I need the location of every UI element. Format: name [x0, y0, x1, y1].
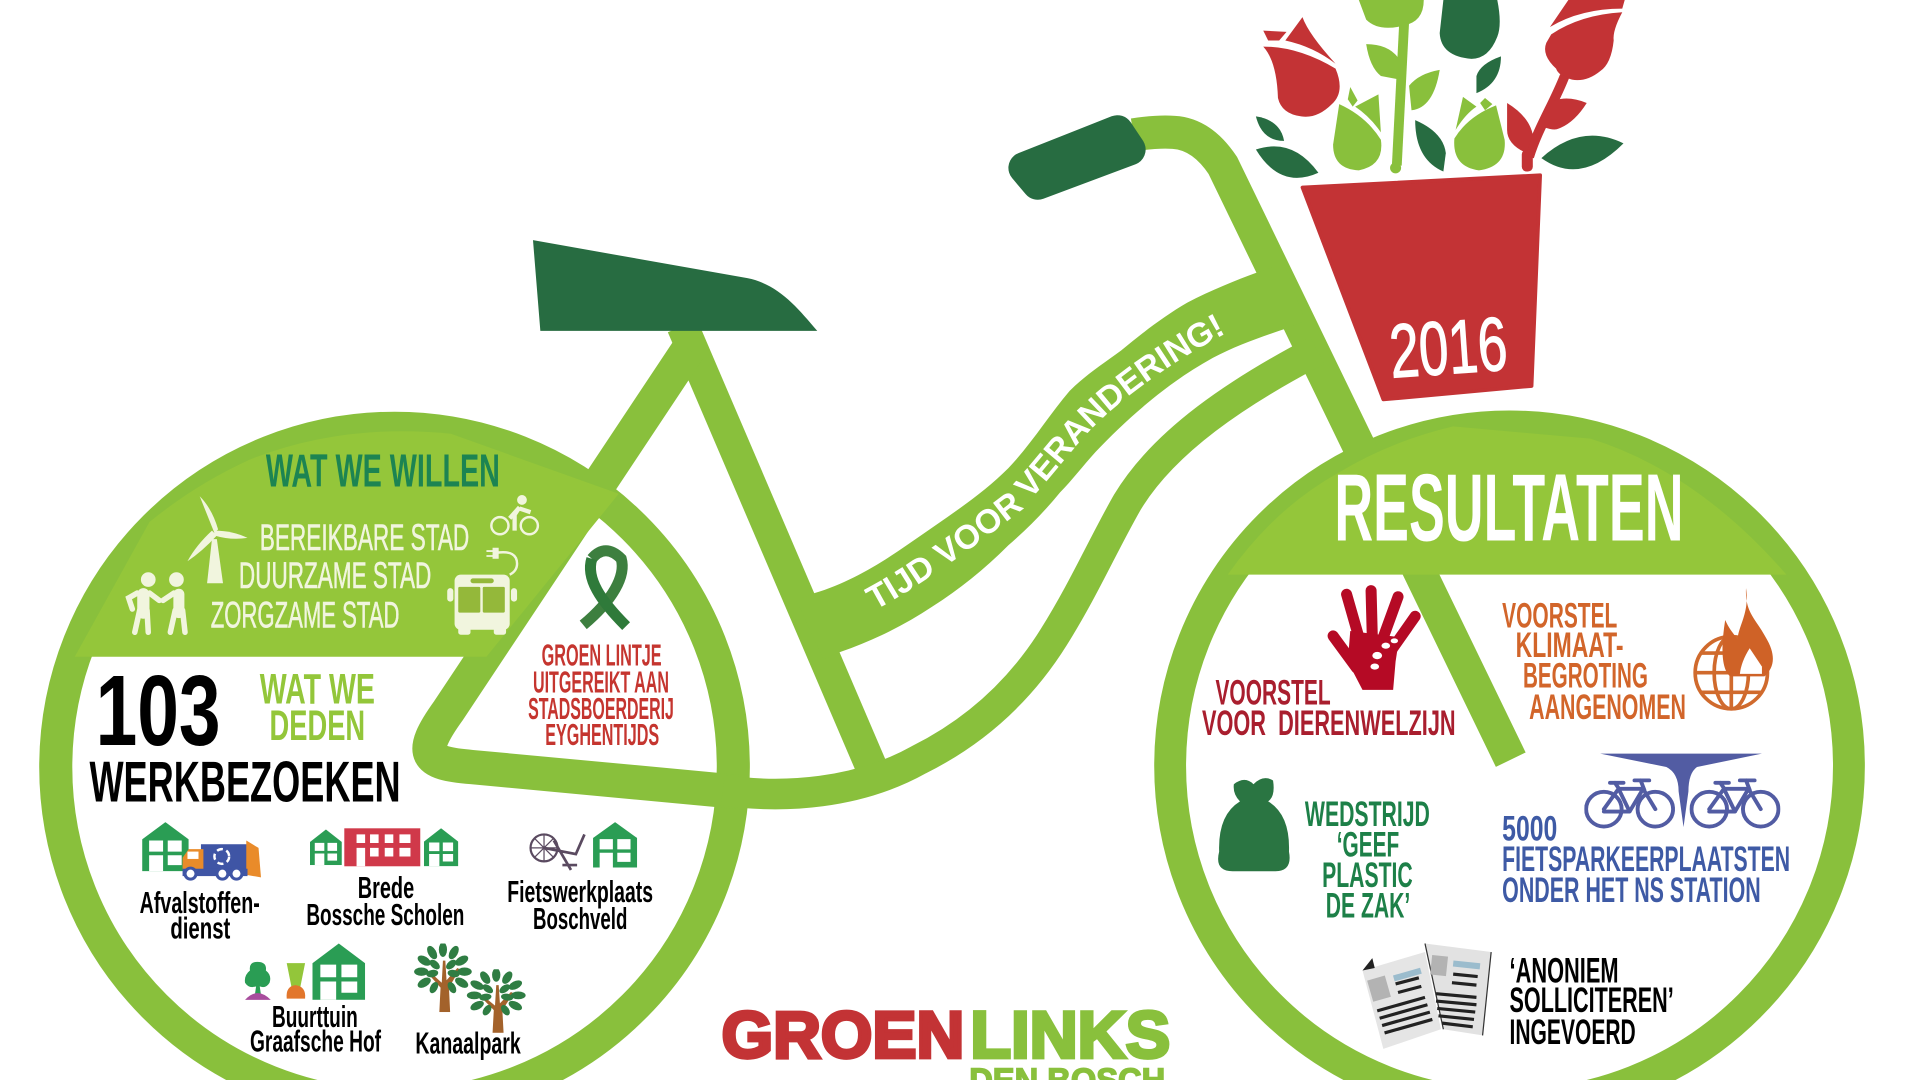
caption: buurttuin graafsche hof: Buurttuin: [272, 1000, 358, 1034]
centre green stem: [1359, 0, 1440, 173]
result: dierenwelzijn: [1202, 591, 1456, 743]
icon: trees: [414, 942, 526, 1033]
text: voorstel voor dierenwelzijn: VOORSTEL: [1215, 673, 1331, 713]
text: anoniem solliciteren ingevoerd: [1510, 951, 1674, 1052]
big number 103: 103: [96, 655, 221, 767]
result: fietsparkeerplaatsen: [1502, 754, 1790, 910]
result: klimaatbegroting: [1502, 588, 1773, 727]
icon: green ribbon: [583, 551, 626, 626]
caption: buurttuin graafsche hof: Graafsche Hof: [250, 1024, 382, 1058]
text: klimaatbegroting: AANGENOMEN: [1529, 687, 1686, 727]
right red rose: [1507, 0, 1625, 172]
result: anoniem solliciteren: [1363, 943, 1674, 1052]
logo word: groen: GROEN: [722, 998, 964, 1072]
icon: station canopy: [1600, 754, 1762, 827]
text: wedstrijd geef plastic de zak: PLASTIC: [1322, 855, 1413, 895]
lower curved tube: [723, 350, 1317, 794]
panel: resultaten header: [1228, 426, 1786, 575]
left red tulip: [1263, 17, 1340, 117]
handlebar grip: [1024, 131, 1130, 184]
text: wedstrijd geef plastic de zak: WEDSTRIJD: [1305, 794, 1430, 834]
text: klimaatbegroting: [1502, 595, 1686, 727]
flower pot: [1302, 175, 1540, 399]
logo: groenlinks den bosch: [722, 998, 1170, 1080]
icon: broken bicycle and house: [531, 822, 637, 870]
text: wedstrijd geef plastic de zak: [1305, 794, 1430, 926]
dark green bud: [1440, 0, 1500, 59]
text: klimaatbegroting: KLIMAAT-: [1516, 625, 1623, 665]
text: city goals: [211, 517, 469, 635]
text: groen lintje: EYGHENTIJDS: [545, 718, 659, 752]
icon: school with houses: [310, 828, 458, 866]
icon: house and garbage truck: [142, 822, 261, 879]
heading: wat we willen: WAT WE WILLEN: [266, 444, 500, 496]
left wheel ring: [56, 428, 733, 1080]
werkbezoeken label: WERKBEZOEKEN: [89, 750, 401, 814]
icon: tree carrot and house: [245, 943, 365, 1000]
text: anoniem solliciteren ingevoerd: ‘ANONIEM: [1510, 951, 1619, 991]
icon: electric bus: [447, 548, 517, 635]
text: 5000 fietsparkeerplaatsten: ONDER HET NS STATION: [1502, 870, 1761, 910]
caption: buurttuin graafsche hof: [250, 1000, 382, 1058]
text: 5000 fietsparkeerplaatsten: 5000: [1502, 809, 1557, 849]
caption: brede bossche scholen: Bossche Scholen: [306, 898, 464, 932]
text: anoniem solliciteren ingevoerd: INGEVOERD: [1510, 1012, 1636, 1052]
icon: red hand: [1333, 591, 1415, 690]
panel: wat we deden: [89, 655, 653, 1061]
caption: fietswerkplaats boschveld: Fietswerkplaats: [507, 875, 653, 909]
handlebar, head tube and fork: [1133, 132, 1511, 760]
seat post and down tube: [682, 326, 872, 769]
caption: afvalstoffendienst: dienst: [170, 912, 230, 946]
light green tulips: [1333, 87, 1505, 170]
logo word: links: LINKS: [970, 998, 1170, 1072]
heading: wat we deden: WAT WE: [260, 665, 375, 713]
saddle: [533, 240, 817, 331]
text: groen lintje: GROEN LINTJE: [542, 638, 662, 672]
icon: wind turbine: [187, 496, 248, 583]
caption: fietswerkplaats boschveld: Boschveld: [533, 902, 627, 936]
right wheel ring: [1170, 426, 1849, 1080]
icon: burning globe: [1695, 588, 1773, 709]
pot year: 2016: [1387, 302, 1510, 395]
text: wedstrijd geef plastic de zak: ‘GEEF: [1337, 824, 1399, 864]
icon: trash bag: [1218, 778, 1290, 871]
caption: afvalstoffendienst: [140, 886, 260, 946]
flowers: [1256, 0, 1625, 178]
text: anoniem solliciteren ingevoerd: SOLLICITEREN’: [1510, 980, 1674, 1020]
heading: wat we deden: DEDEN: [270, 702, 365, 750]
text: klimaatbegroting: VOORSTEL: [1502, 595, 1617, 635]
caption: brede bossche scholen: Brede: [358, 871, 414, 905]
top tube banner: [796, 263, 1305, 659]
icon: two people: [129, 572, 185, 632]
text: voorstel voor dierenwelzijn: [1202, 673, 1456, 743]
text: 5000 fietsparkeerplaatsten: [1502, 809, 1790, 910]
caption: fietswerkplaats boschveld: [507, 875, 653, 936]
banner text: TIJD VOOR VERANDERING!: [864, 314, 1224, 607]
dark green leaves: [1256, 56, 1623, 178]
text: groen lintje: UITGEREIKT AAN: [533, 665, 669, 699]
heading: wat we deden: [260, 665, 375, 750]
callout: groen lintje: [528, 551, 674, 752]
caption: kanaalpark: Kanaalpark: [415, 1027, 521, 1061]
text: groen lintje: STADSBOERDERIJ: [528, 692, 674, 726]
text: groen lintje: [528, 638, 674, 752]
text: city goals: ZORGZAME STAD: [211, 594, 399, 635]
caption: brede bossche scholen: [306, 871, 464, 932]
result: wedstrijd plastic: [1218, 778, 1430, 926]
icon: two bicycles: [1586, 780, 1778, 827]
caption: afvalstoffendienst: Afvalstoffen-: [140, 886, 260, 920]
text: city goals: DUURZAME STAD: [239, 555, 431, 596]
icon: documents: [1363, 943, 1491, 1049]
text: city goals: BEREIKBARE STAD: [260, 517, 469, 558]
icon: cyclist: [491, 495, 538, 534]
text: wedstrijd geef plastic de zak: DE ZAK’: [1326, 886, 1410, 926]
panel: wat we willen header: [75, 431, 619, 657]
text: klimaatbegroting: BEGROTING: [1523, 655, 1648, 695]
seat stay and chain stay: [429, 349, 747, 793]
text: voorstel voor dierenwelzijn: VOOR DIERENWELZIJN: [1202, 703, 1456, 743]
